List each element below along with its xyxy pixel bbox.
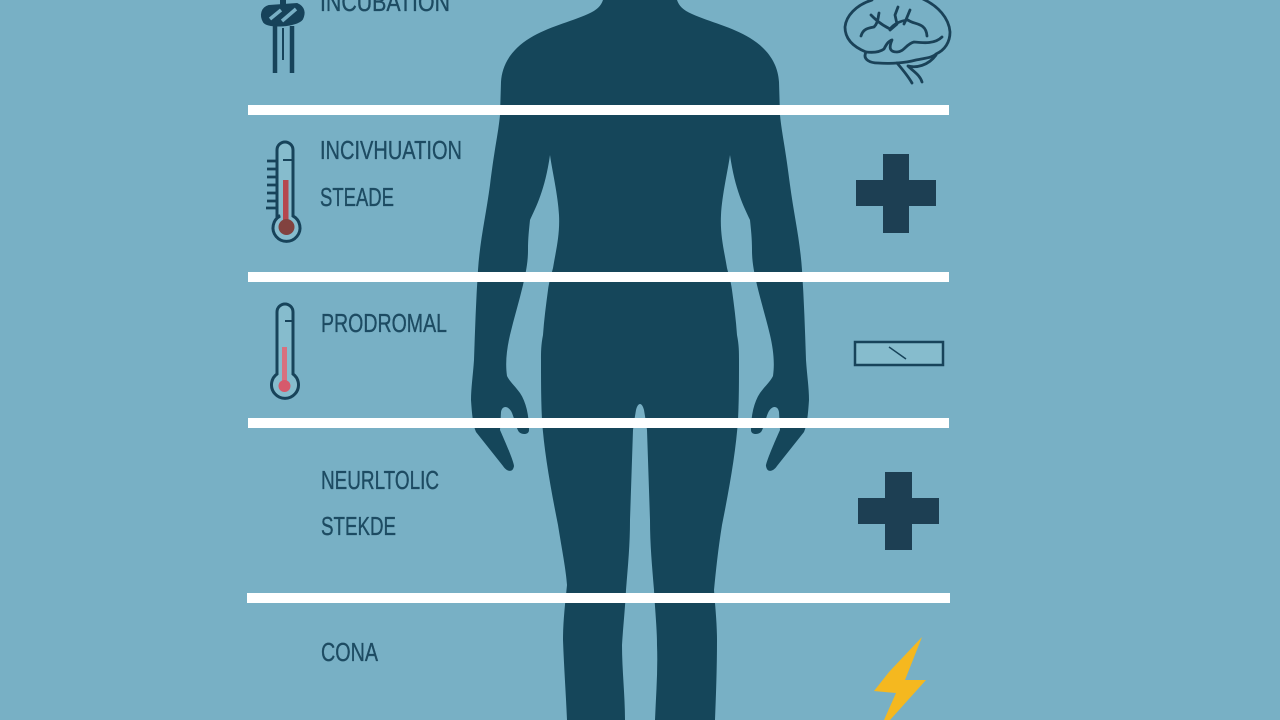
icon: rectangle gauge <box>855 342 943 365</box>
icon: brain <box>845 0 950 83</box>
icon: nerve figure <box>262 0 304 73</box>
label: neurologic stage second line: STEKDE <box>321 511 396 541</box>
label: incubation stage second line: STEADE <box>320 182 394 212</box>
icon: medical cross lower <box>858 472 939 550</box>
icon: thermometer <box>272 304 298 398</box>
icon: thermometer with scale <box>266 142 300 241</box>
icon: medical cross upper <box>856 154 936 233</box>
label: prodromal: PRODROMAL <box>321 308 447 338</box>
label: coma: CONA <box>321 637 378 667</box>
divider lines <box>247 105 950 603</box>
human body silhouette <box>471 0 809 720</box>
label: neurologic: NEURLTOLIC <box>321 465 439 495</box>
icon: lightning bolt <box>874 637 926 720</box>
label: incubation stage first line: INCIVHUATION <box>320 135 462 165</box>
